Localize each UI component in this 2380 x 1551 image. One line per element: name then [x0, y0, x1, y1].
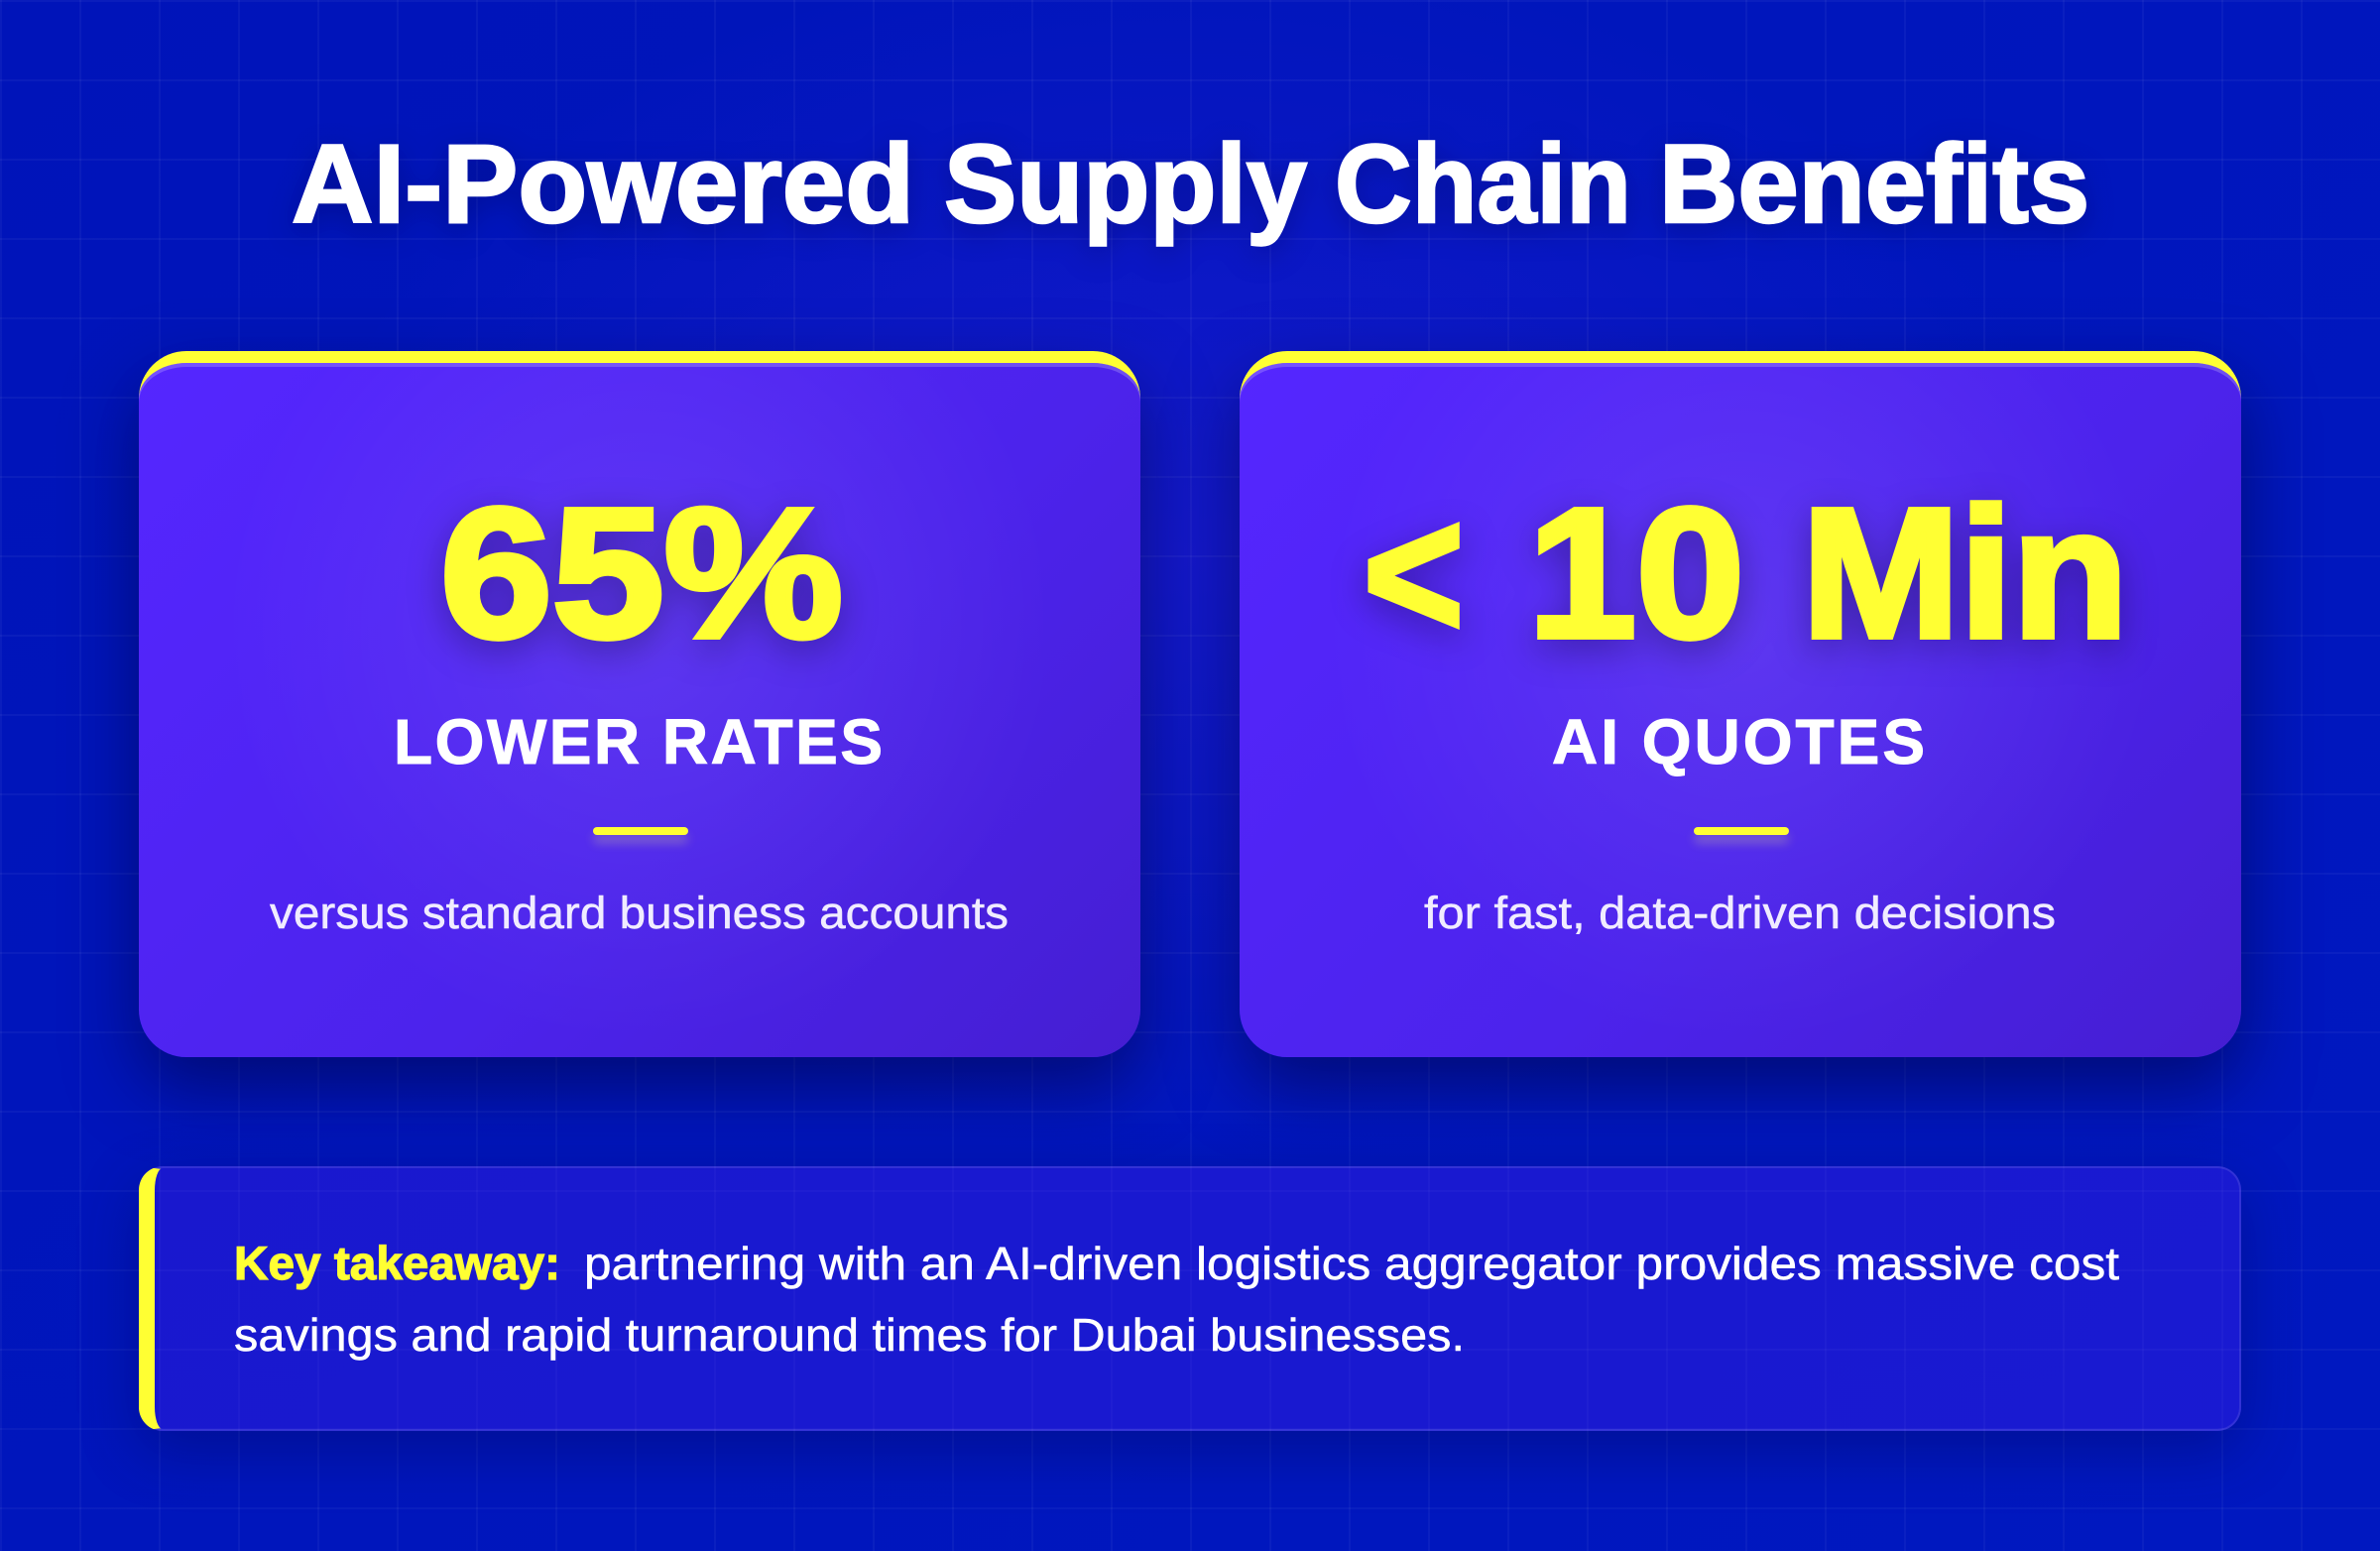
title: AI-Powered [292, 122, 914, 246]
title: Chain [1335, 122, 1631, 246]
panel: lower rates card [139, 351, 1140, 1057]
label: lower rates: LOWER RATES [394, 706, 883, 777]
panel: AI quotes card [1240, 351, 2241, 1057]
title: Supply [944, 122, 1307, 246]
stat: 65%: 65% [440, 471, 843, 676]
callout text: first line: partnering with an AI-driven logistics aggregator provides massive cost [584, 1238, 2119, 1289]
stat: under 10 minutes: 10 [1528, 471, 1744, 676]
stat: under 10 minutes: Min [1802, 471, 2128, 676]
stat: under 10 minutes: < [1364, 471, 1464, 676]
divider accent [1694, 827, 1789, 835]
callout: key takeaway [139, 1166, 2241, 1431]
title: Benefits [1659, 122, 2089, 246]
label: AI quotes: AI QUOTES [1552, 706, 1925, 777]
divider accent [593, 827, 688, 835]
callout label: key takeaway: Key takeaway: [234, 1237, 560, 1289]
description: AI quotes: for fast, data-driven decisions [1424, 888, 2056, 938]
description: lower rates: versus standard business accounts [270, 888, 1009, 938]
callout text: second line: savings and rapid turnaround times for Dubai businesses. [234, 1309, 1465, 1361]
